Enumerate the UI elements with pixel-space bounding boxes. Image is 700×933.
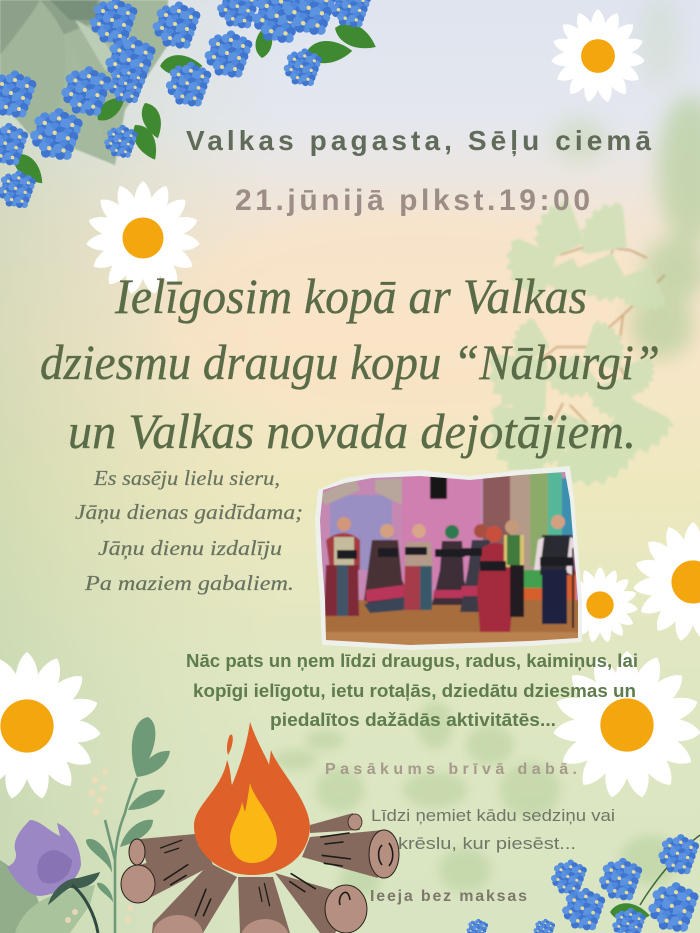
- daisy upper left: [85, 181, 201, 296]
- background: large grey-green leaves top left: [0, 0, 168, 165]
- singer 1: [324, 517, 360, 616]
- title: Ielīgosim kopā ar Valkas: [114, 268, 587, 324]
- note: bring a blanket or chair: Līdzi ņemiet kādu sedziņu vai: [371, 806, 615, 825]
- body text invitation: piedalītos dažādās aktivitātēs...: [270, 710, 556, 730]
- daisy lower right: [552, 651, 700, 800]
- poem: Pa maziem gabaliem.: [84, 571, 294, 595]
- background: fern leaves on the right: [473, 193, 680, 493]
- singer 6: [477, 526, 514, 632]
- daisy right edge: [632, 522, 700, 643]
- icon: green plant: [65, 717, 170, 933]
- singer 7: [504, 520, 524, 617]
- note: bring a blanket or chair: [371, 806, 615, 853]
- forget-me-nots top left: [0, 0, 381, 208]
- background: blurred green leaves top right: [552, 0, 700, 359]
- body text invitation: Nāc pats un ņem līdzi draugus, radus, kaimiņus, lai: [186, 651, 638, 671]
- bottom left green leaves: [0, 860, 95, 933]
- title: un Valkas novada dejotājiem.: [68, 403, 636, 459]
- poem: Es sasēju lielu sieru,: [93, 466, 280, 490]
- inner flame: [230, 783, 277, 863]
- poem: Jāņu dienu izdalīju: [98, 536, 282, 560]
- body text invitation: kopīgi ielīgotu, ietu rotaļās, dziedātu dziesmas un: [193, 681, 636, 701]
- heading: date and time: 21.jūnijā plkst.19:00: [235, 184, 590, 217]
- icon: campfire: [121, 722, 399, 933]
- singer 4: [432, 525, 472, 605]
- poem: [75, 466, 303, 595]
- note: bring a blanket or chair: krēslu, kur piesēst...: [398, 834, 576, 853]
- logs: [121, 813, 399, 933]
- singer 8: [534, 515, 577, 624]
- icon: purple flower: [7, 820, 100, 933]
- note: outdoor event: Pasākums brīvā dabā.: [325, 761, 577, 778]
- daisy lower left: [0, 652, 102, 801]
- poem: Jāņu dienas gaidīdama;: [75, 500, 303, 524]
- photo of the choir with torn paper frame: [315, 465, 585, 650]
- body text invitation: [186, 651, 638, 730]
- daisy right of the photo: [562, 567, 638, 643]
- heading: location: Valkas pagasta, Sēļu ciemā: [186, 125, 651, 156]
- background: blurred leaves bottom centre: [273, 701, 680, 898]
- forget-me-nots bottom right: [467, 834, 700, 933]
- title: dziesmu draugu kopu “Nāburgi”: [40, 334, 660, 390]
- daisy top right: [551, 9, 645, 103]
- flame: [194, 722, 310, 875]
- title: [40, 268, 660, 459]
- singer 3: [404, 524, 433, 610]
- note: free entry: Ieeja bez maksas: [370, 888, 527, 905]
- singer 2: [364, 524, 412, 613]
- singer 5: [460, 524, 490, 612]
